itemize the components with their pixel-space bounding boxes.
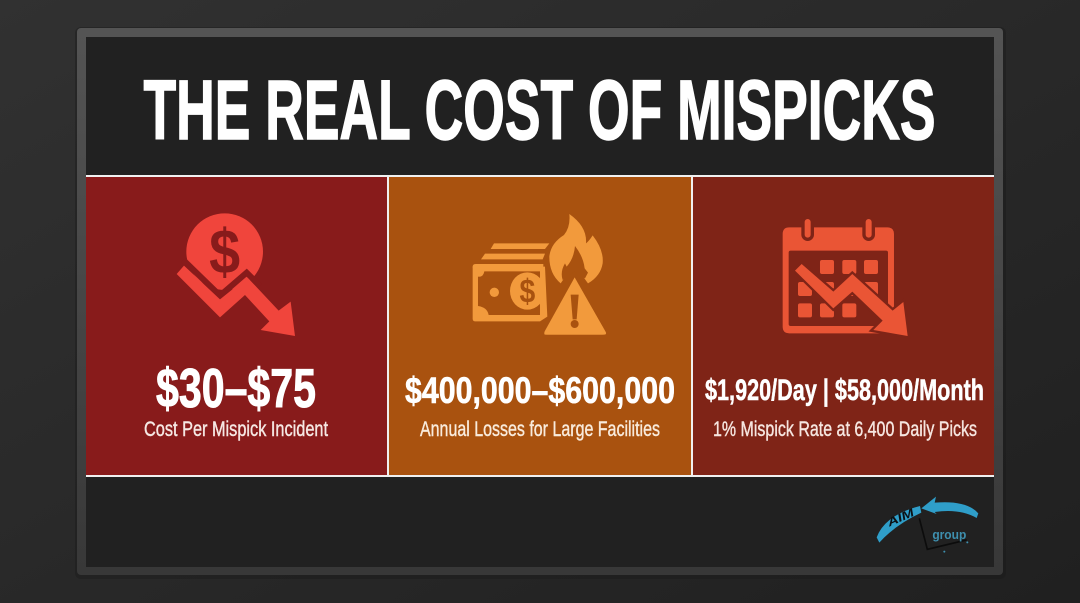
logo: AIM group: AIM: [884, 507, 917, 530]
logo: AIM group: [877, 497, 978, 553]
caption: daily and monthly cost: 1% Mispick Rate at 6,400 Daily Picks: [713, 418, 977, 441]
icon: coin with falling arrow: $: [209, 216, 240, 287]
figure: annual losses: $400,000–$600,000: [405, 370, 675, 411]
figure: cost per incident: $30–$75: [156, 357, 316, 419]
icon: cash, flame and warning: $: [519, 272, 535, 310]
logo: AIM group: group: [932, 527, 966, 542]
panel: cost per incident: [86, 177, 387, 476]
icon: cash, flame and warning: [473, 214, 608, 337]
monitor frame: [75, 27, 1006, 579]
icon: calendar with falling arrow: [783, 217, 908, 336]
panel dividers: [86, 175, 994, 477]
panel: daily and monthly cost: [693, 177, 994, 476]
caption: cost per incident: Cost Per Mispick Incident: [144, 418, 328, 441]
icon: coin with falling arrow: [177, 213, 295, 336]
caption: annual losses: Annual Losses for Large Facilities: [420, 418, 660, 441]
panel: annual losses: [389, 177, 691, 476]
